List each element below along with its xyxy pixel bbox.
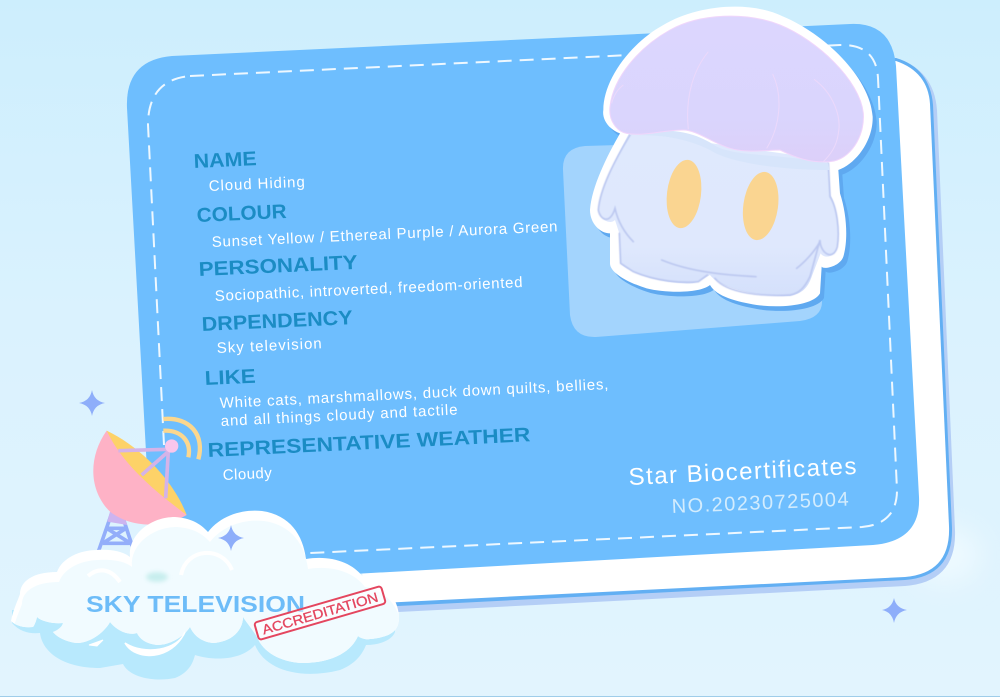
pink dish	[93, 431, 187, 525]
accreditation stamp: ACCREDITATION	[260, 590, 380, 637]
field: name	[193, 148, 305, 195]
blue certificate card	[127, 24, 919, 590]
body	[598, 132, 839, 296]
heading: representative weather: REPRESENTATIVE WEATHER	[207, 424, 531, 462]
certificate title: Star Biocertificates	[628, 453, 857, 491]
left eye	[663, 158, 705, 230]
heading: personality: PERSONALITY	[198, 252, 359, 281]
value: like: and all things cloudy and tactile	[220, 401, 458, 430]
purple cap	[610, 16, 863, 162]
mint accent	[146, 572, 168, 582]
label: sky television: SKY TELEVISION	[86, 591, 305, 617]
character: cloud creature	[590, 7, 877, 311]
white crescent in shadow	[125, 632, 185, 655]
field: dependency	[201, 307, 354, 357]
heading: dependency: DRPENDENCY	[201, 307, 354, 336]
star sparkle: lower right	[882, 598, 907, 623]
cloud lower shadow	[12, 610, 395, 679]
cap fold lines	[612, 52, 839, 162]
photo panel behind character	[563, 140, 822, 337]
feed ball	[165, 439, 178, 453]
field: personality	[198, 252, 523, 305]
star sparkle: upper left	[79, 390, 105, 416]
cloud white body	[11, 511, 399, 663]
hat shadow band	[630, 130, 829, 170]
field: representative weather	[207, 424, 531, 484]
heading: like: LIKE	[204, 366, 256, 390]
star sparkle: on cloud	[218, 525, 244, 551]
value: representative weather: Cloudy	[222, 465, 273, 484]
cloud with sky television label	[11, 511, 401, 679]
tower cap	[107, 512, 127, 525]
field: colour	[196, 201, 558, 251]
signal waves	[163, 419, 200, 459]
value: like	[219, 376, 609, 430]
sticker shadow	[594, 11, 877, 311]
value: name: Cloud Hiding	[208, 174, 305, 195]
field: like	[204, 366, 609, 430]
certificate number: NO.20230725004	[671, 489, 849, 518]
right eye	[739, 170, 783, 242]
heading: name: NAME	[193, 148, 257, 173]
yellow dish rim	[107, 431, 187, 515]
antenna struts	[118, 449, 169, 498]
white sticker outline	[590, 7, 873, 306]
tower	[98, 513, 137, 562]
cloud inner tint	[13, 521, 401, 670]
value: dependency: Sky television	[216, 335, 322, 357]
value: colour: Sunset Yellow / Ethereal Purple / Aurora Green	[211, 218, 558, 251]
small white wedge	[89, 640, 103, 646]
satellite dish illustration	[93, 419, 200, 562]
value: like: White cats, marshmallows, duck down quilts, bellies,	[219, 376, 609, 412]
stitched dashed border	[148, 45, 897, 553]
accreditation stamp	[254, 586, 386, 640]
heading: colour: COLOUR	[196, 201, 288, 227]
back page of certificate	[360, 58, 955, 614]
value: personality: Sociopathic, introverted, freedom-oriented	[214, 274, 523, 305]
body contour lines	[598, 135, 838, 295]
